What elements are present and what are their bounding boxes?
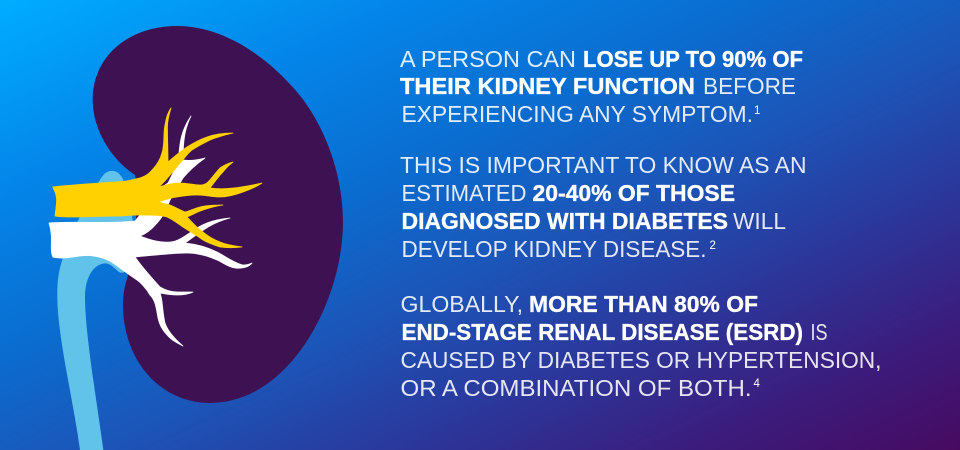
text block: symptoms: THEIR KIDNEY FUNCTION	[400, 73, 695, 99]
icon: kidney illustration	[49, 26, 343, 450]
text block: ESRD causes: END-STAGE RENAL DISEASE (ESRD)	[402, 319, 803, 345]
text block: symptoms: EXPERIENCING ANY SYMPTOM.	[402, 101, 753, 127]
text block: diabetes risk: 20-40% OF THOSE	[532, 180, 735, 206]
text block: ESRD causes: OR A COMBINATION OF BOTH.	[400, 375, 752, 401]
text block: diabetes risk: 2	[710, 240, 716, 252]
text block: symptoms: A PERSON CAN	[400, 46, 576, 72]
text block: diabetes risk: DIAGNOSED WITH DIABETES	[402, 208, 728, 234]
text block: diabetes risk: DEVELOP KIDNEY DISEASE.	[402, 236, 706, 262]
white vessel branches	[49, 116, 252, 346]
text block: ESRD causes: CAUSED BY DIABETES OR HYPERTENSION,	[400, 347, 882, 373]
kidney body	[93, 26, 343, 403]
text block: ESRD causes: IS	[810, 319, 828, 345]
text block: ESRD causes: MORE THAN 80% OF	[529, 291, 758, 317]
text block: diabetes risk: ESTIMATED	[402, 180, 526, 206]
text block: diabetes risk	[400, 152, 806, 262]
text block: symptoms: 1	[754, 105, 760, 117]
ureter and vessel	[57, 171, 133, 450]
text block: symptoms	[400, 46, 803, 127]
text block: diabetes risk: THIS IS IMPORTANT TO KNOW AS AN	[400, 152, 806, 178]
text block: diabetes risk: WILL	[733, 208, 786, 234]
text block: symptoms: BEFORE	[703, 73, 796, 99]
text block: ESRD causes	[400, 291, 882, 401]
text block: symptoms: LOSE UP TO 90% OF	[583, 46, 803, 72]
yellow vessel branches	[53, 108, 262, 248]
text block: ESRD causes: GLOBALLY,	[400, 291, 523, 317]
text block: ESRD causes: 4	[754, 378, 760, 390]
